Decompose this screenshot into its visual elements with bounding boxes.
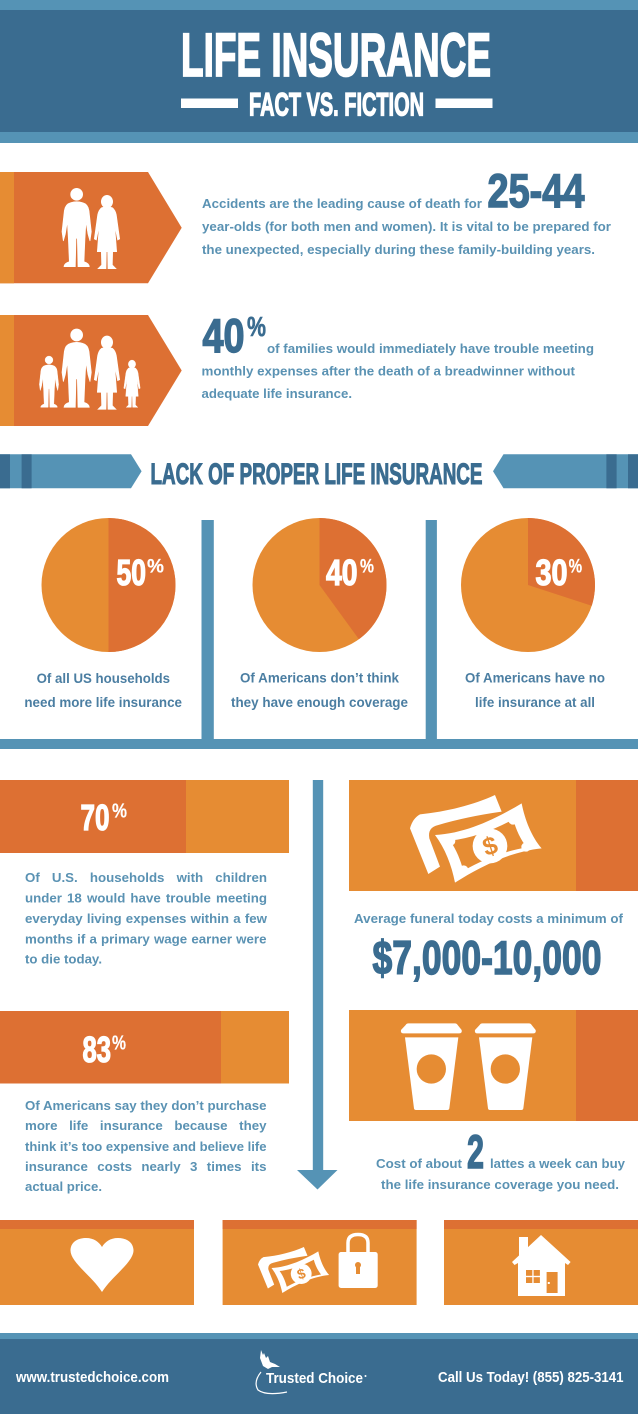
text: lattes (376, 1125, 626, 1192)
text: funeral cost: Average funeral today costs a minimum of (354, 911, 624, 926)
text block: accidents: Accidents are the leading cause of death for (202, 196, 482, 211)
footer logo (256, 1350, 366, 1394)
text: funeral cost (354, 911, 624, 984)
footer phone: Call Us Today! (855) 825-3141 (438, 1370, 624, 1386)
bar: 83 percent: 83 (82, 1029, 111, 1070)
subtitle with side rules: FACT VS. FICTION (249, 86, 424, 122)
panel: lattes (349, 1010, 638, 1121)
text block: accidents (202, 164, 611, 257)
icon: heart (70, 1238, 134, 1292)
pie chart: 30 percent: 30 (536, 552, 568, 593)
text block: 70 percent: Of U.S. households with children (25, 870, 267, 885)
text block: 40 percent of families: monthly expenses after the death of a breadwinner without (202, 364, 576, 378)
icon: small dollar bills: $ (295, 1266, 308, 1283)
bar: 83 percent (0, 1011, 289, 1084)
text block: 83 percent: more life insurance because they (25, 1118, 267, 1133)
text block: 83 percent (25, 1098, 267, 1194)
pie chart: 50 percent: 50 (116, 552, 146, 593)
pie caption: 40 percent: they have enough coverage (231, 694, 408, 710)
pie caption: 40 percent: Of Americans don’t think (240, 670, 399, 686)
text block: 40 percent of families: 40 (202, 309, 244, 362)
footer website: www.trustedchoice.com (15, 1370, 169, 1386)
dividers frame (0, 520, 638, 749)
bar: 70 percent: % (112, 800, 127, 822)
footer logo: Trusted Choice (266, 1370, 363, 1387)
text block: 83 percent: actual price. (25, 1179, 102, 1194)
pie caption: 30 percent: Of Americans have no (465, 670, 605, 686)
pie chart: 40 percent: % (360, 556, 374, 578)
pie chart: 50 percent: % (147, 556, 164, 578)
text block: 70 percent: to die today. (25, 952, 102, 966)
bar: 83 percent: % (112, 1032, 126, 1054)
subtitle with side rules (181, 86, 492, 122)
icon: padlock (339, 1234, 378, 1288)
text block: 83 percent: think it’s too expensive and believe life (25, 1139, 266, 1154)
footer (0, 1333, 638, 1414)
pie chart: 40 percent: 40 (326, 552, 358, 593)
text block: 70 percent: everyday living expenses within a few (25, 911, 268, 926)
text: lattes: 2 (467, 1125, 484, 1178)
text block: 70 percent (25, 870, 268, 966)
icon: dollar bills: $ (479, 831, 501, 862)
arrow: center down arrow (297, 780, 338, 1190)
text: lattes: Cost of about (376, 1156, 463, 1171)
text block: accidents: year-olds (for both men and women). It is vital to be prepared for (202, 219, 611, 234)
bar: 70 percent (0, 780, 289, 853)
pie chart: 30 percent (461, 518, 595, 652)
text block: 70 percent: months if a primary wage earner were (25, 932, 266, 946)
pie caption: 30 percent (465, 670, 605, 710)
text block: 40 percent of families: of families would immediately have trouble meeting (267, 341, 594, 356)
text block: 83 percent: insurance costs nearly 3 times its (25, 1159, 266, 1174)
text block: 83 percent: Of Americans say they don’t purchase (25, 1098, 266, 1113)
text block: 40 percent of families: adequate life insurance. (202, 386, 352, 401)
text block: 40 percent of families: % (247, 311, 266, 342)
pie chart: 30 percent: % (569, 556, 582, 578)
icon: house (512, 1235, 571, 1296)
pie chart: 40 percent (252, 518, 387, 652)
pie caption: 50 percent: Of all US households (37, 670, 170, 686)
section heading: lack of proper life insurance (0, 454, 638, 491)
icon: family of four (39, 329, 140, 409)
number: 25-44: 25-44 (488, 164, 584, 217)
panel: heart (0, 1220, 194, 1305)
pie caption: 40 percent (231, 670, 408, 710)
pie caption: 50 percent (24, 670, 182, 710)
text block: 70 percent: under 18 would have trouble meeting (25, 890, 267, 906)
bar: 70 percent: 70 (80, 797, 110, 838)
text block: accidents: the unexpected, especially during these family-building years. (202, 242, 595, 257)
icon: two coffee cups (401, 1023, 536, 1110)
icon: dollar bills (410, 795, 542, 883)
panel: funeral money (349, 780, 638, 891)
text: lattes: lattes a week can buy (490, 1156, 626, 1171)
pie caption: 50 percent: need more life insurance (24, 694, 182, 710)
header banner (0, 0, 638, 143)
panel: money and lock (223, 1220, 417, 1305)
arrow panel: family (0, 315, 182, 426)
text block: 40 percent of families (202, 309, 594, 401)
icon: man and woman (62, 188, 120, 269)
pie caption: 30 percent: life insurance at all (475, 694, 595, 710)
pie chart: 50 percent (42, 518, 176, 652)
arrow panel: couple (0, 172, 182, 283)
icon: small dollar bills (258, 1247, 329, 1293)
panel: house (444, 1220, 638, 1305)
text: lattes: the life insurance coverage you need. (381, 1177, 619, 1192)
